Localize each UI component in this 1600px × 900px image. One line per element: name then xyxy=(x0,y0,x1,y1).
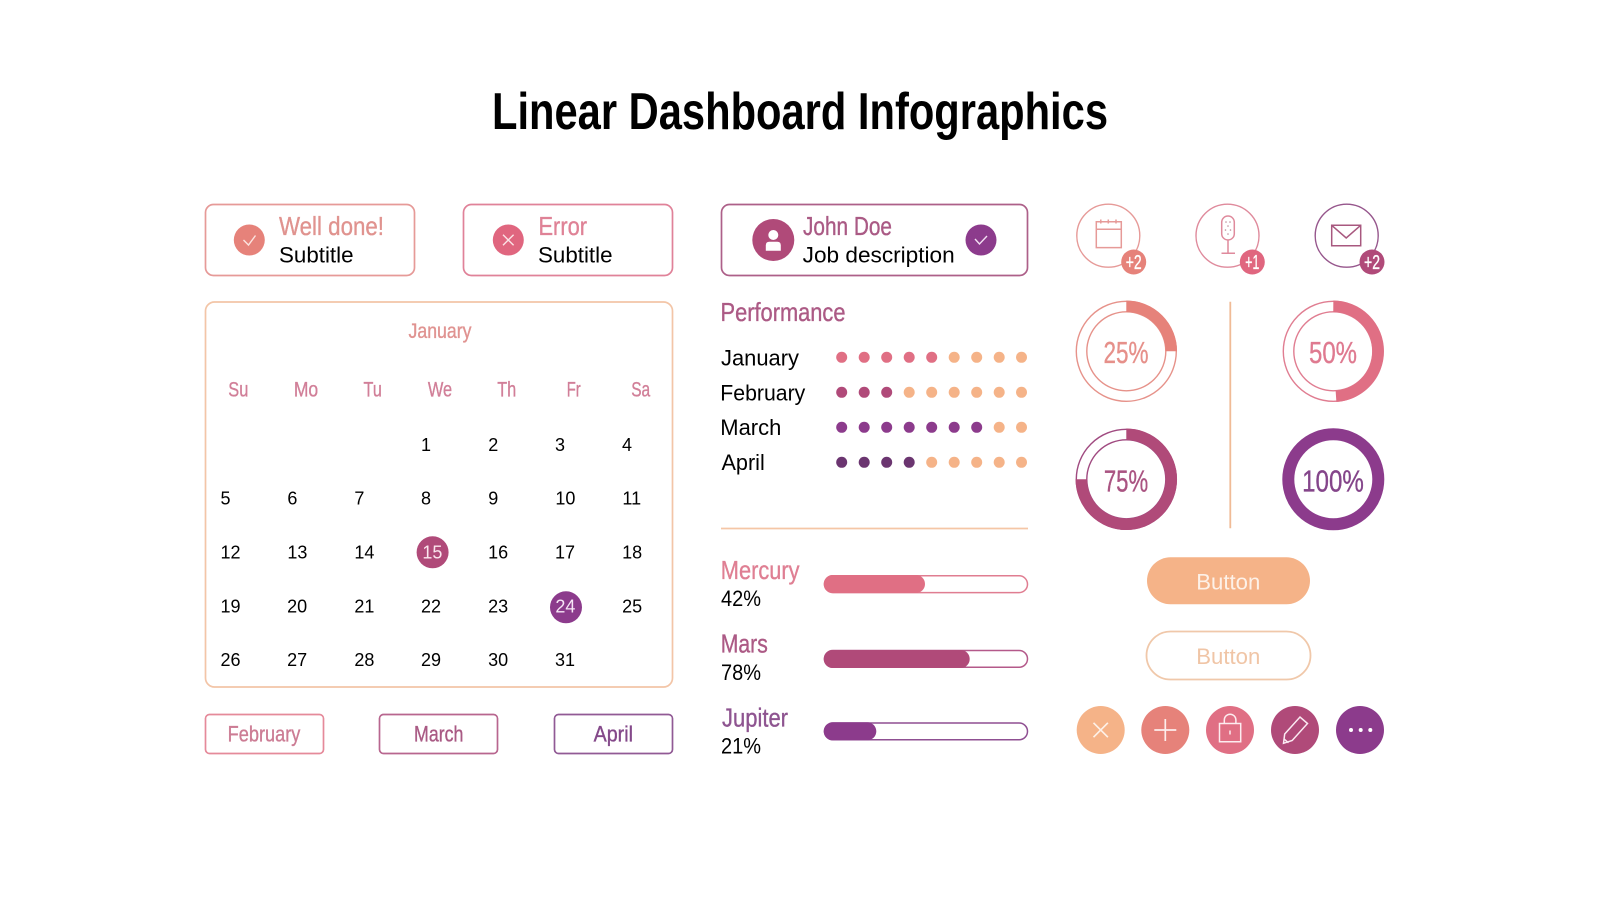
calendar dates: 1 xyxy=(421,435,431,455)
panel: calendar xyxy=(206,302,672,687)
calendar dates: 13 xyxy=(287,542,307,562)
calendar dates: 21 xyxy=(354,596,374,616)
donut: 50% xyxy=(1283,301,1383,401)
performance row: January: January xyxy=(721,346,799,371)
weekday headers: Mo xyxy=(294,379,318,402)
calendar dates: 19 xyxy=(220,596,241,616)
icon: user avatar xyxy=(752,219,794,261)
calendar dates: 2 xyxy=(488,435,498,455)
calendar dates: 23 xyxy=(488,596,508,616)
performance row: March xyxy=(720,415,1027,440)
calendar dates: 15 xyxy=(422,542,442,562)
performance row: February: February xyxy=(720,380,805,405)
donut: 75% xyxy=(1076,429,1176,529)
panel: user card xyxy=(722,204,1028,276)
filled button xyxy=(1147,557,1310,604)
calendar dates: 12 xyxy=(220,542,241,562)
progress: Jupiter xyxy=(721,703,1028,758)
donut: 25%: 25% xyxy=(1104,335,1148,370)
calendar dates: 6 xyxy=(287,489,297,509)
icon: cross circle xyxy=(493,224,524,256)
performance row: March: March xyxy=(720,415,781,440)
calendar dates: 29 xyxy=(421,650,441,670)
calendar dates: 28 xyxy=(354,650,374,670)
icon: check circle xyxy=(234,224,265,256)
calendar dates: 31 xyxy=(555,650,575,670)
outline button xyxy=(1146,632,1310,680)
progress: Jupiter: Jupiter xyxy=(722,703,788,733)
job description: Job description xyxy=(803,243,955,268)
calendar dates: 17 xyxy=(555,542,575,562)
calendar dates: 18 xyxy=(622,542,642,562)
calendar dates: 30 xyxy=(488,650,508,670)
calendar dates: 8 xyxy=(421,489,431,509)
icon: calendar notification xyxy=(1077,204,1146,274)
tab: April xyxy=(554,714,672,754)
alert heading: Well done! xyxy=(279,211,384,241)
title: Linear Dashboard Infographics xyxy=(492,83,1108,141)
tab: February: February xyxy=(228,722,300,746)
weekday headers: Su xyxy=(228,379,248,402)
calendar dates: 20 xyxy=(287,596,307,616)
alert subtitle: Subtitle xyxy=(538,242,612,268)
icon button: close xyxy=(1077,706,1125,754)
performance row: February xyxy=(720,380,1027,405)
icon button: more xyxy=(1336,706,1384,754)
filled button: Button xyxy=(1196,569,1260,594)
donut: 100% xyxy=(1288,434,1378,524)
calendar dates: 24 xyxy=(555,596,575,616)
donut: 75%: 75% xyxy=(1104,464,1148,499)
icon: microphone notification xyxy=(1196,204,1265,274)
progress: Mercury: Mercury xyxy=(721,555,800,585)
progress: Mercury: 42% xyxy=(721,586,761,611)
performance row: April: April xyxy=(722,450,765,475)
icon: mail notification xyxy=(1315,204,1384,274)
calendar dates: 5 xyxy=(220,489,231,509)
donut: 25% xyxy=(1076,301,1176,401)
performance row: January xyxy=(721,346,1027,371)
icon button: edit xyxy=(1271,706,1319,754)
icon button: add xyxy=(1141,706,1189,754)
calendar dates: 10 xyxy=(555,489,575,509)
weekday headers: We xyxy=(428,379,452,402)
weekday headers: Sa xyxy=(631,379,650,402)
tab: March xyxy=(380,714,498,754)
outline button: Button xyxy=(1196,644,1260,669)
calendar dates: 26 xyxy=(220,650,241,670)
progress: Mars xyxy=(721,629,1028,685)
calendar dates: 11 xyxy=(622,489,641,509)
icon: microphone notification: +1 xyxy=(1245,252,1259,274)
icon: calendar notification: +2 xyxy=(1126,252,1142,274)
tab: April: April xyxy=(594,722,633,746)
icon button: lock xyxy=(1206,706,1254,754)
panel: well done alert xyxy=(206,204,414,276)
calendar dates: 14 xyxy=(354,542,374,562)
icon: check circle xyxy=(966,224,996,256)
donut: 100%: 100% xyxy=(1302,464,1364,499)
alert subtitle: Subtitle xyxy=(279,242,354,268)
progress: Mars: Mars xyxy=(721,629,768,659)
calendar dates: 16 xyxy=(488,542,508,562)
progress: Jupiter: 21% xyxy=(721,733,761,758)
tab: February xyxy=(206,714,324,754)
weekday headers: Fr xyxy=(567,379,581,402)
performance row: April xyxy=(722,450,1027,475)
donut: 50%: 50% xyxy=(1309,335,1357,370)
calendar dates: 3 xyxy=(555,435,565,455)
progress: Mercury xyxy=(721,555,1028,611)
progress: Mars: 78% xyxy=(721,660,761,685)
calendar dates: 7 xyxy=(354,489,364,509)
weekday headers: Th xyxy=(497,379,516,402)
icon: mail notification: +2 xyxy=(1364,252,1380,274)
calendar month heading: January xyxy=(408,320,472,343)
performance heading: Performance xyxy=(720,297,846,327)
weekday headers xyxy=(228,379,650,402)
panel: error alert xyxy=(464,204,672,276)
calendar dates: 25 xyxy=(622,596,642,616)
calendar dates xyxy=(220,435,642,670)
user name: John Doe xyxy=(803,211,892,241)
tab: March: March xyxy=(414,722,463,746)
calendar dates: 9 xyxy=(488,489,498,509)
calendar dates: 22 xyxy=(421,596,441,616)
highlight: day 24 xyxy=(550,591,582,623)
highlight: day 15 xyxy=(417,536,449,568)
calendar dates: 4 xyxy=(622,435,632,455)
calendar dates: 27 xyxy=(287,650,307,670)
alert heading: Error xyxy=(538,211,587,241)
weekday headers: Tu xyxy=(364,379,382,402)
